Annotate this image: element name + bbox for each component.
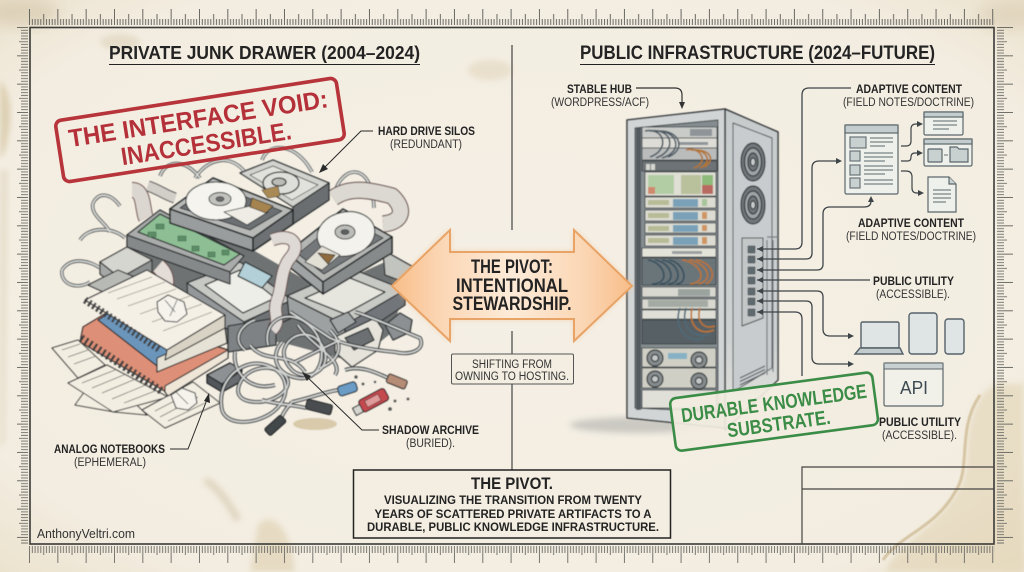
label: public utility upper: PUBLIC UTILITY xyxy=(873,276,954,288)
arrow: the pivot: STEWARDSHIP. xyxy=(452,294,572,315)
icon: laptop tablet phone xyxy=(855,313,964,354)
label: hard drive silos: HARD DRIVE SILOS xyxy=(378,126,475,138)
hard drive: right xyxy=(287,206,392,294)
ribbon cables behind drives xyxy=(132,186,401,224)
caption box: the pivot xyxy=(354,470,670,538)
icon: api window xyxy=(884,363,943,406)
label: hard drive silos: (REDUNDANT) xyxy=(390,139,462,151)
label: adaptive content top: (FIELD NOTES/DOCTRINE) xyxy=(843,97,974,109)
icon: small page panel xyxy=(924,112,963,135)
callout: shifting from owning to hosting: OWNING TO HOSTING. xyxy=(455,371,569,383)
label: shadow archive: (BURIED). xyxy=(406,438,455,450)
label: stable hub: (WORDPRESS/ACF) xyxy=(551,97,649,109)
icon: content page window xyxy=(845,125,898,194)
hard drive: back xyxy=(240,160,329,224)
rack fans front xyxy=(647,350,707,389)
label: adaptive content lower xyxy=(846,218,976,243)
label: analog notebooks: ANALOG NOTEBOOKS xyxy=(54,444,165,456)
arrow: the pivot: THE PIVOT: xyxy=(471,257,553,278)
icon: document xyxy=(928,177,956,212)
rack units xyxy=(642,127,717,408)
callout: shifting from owning to hosting xyxy=(452,354,574,384)
debris xyxy=(354,375,409,411)
lower centre drive xyxy=(187,262,292,352)
drive with circuit board xyxy=(127,210,272,288)
callout: shifting from owning to hosting: SHIFTING FROM xyxy=(472,359,552,371)
label: stable hub xyxy=(551,84,685,109)
attribution: AnthonyVeltri.com xyxy=(37,526,135,541)
stamp: the interface void: THE INTERFACE VOID: xyxy=(67,85,330,153)
side exhaust fans xyxy=(741,143,765,224)
lower left drive xyxy=(88,247,190,318)
title block: empty drawing stamp xyxy=(802,467,994,544)
label: public utility lower: (ACCESSIBLE). xyxy=(882,430,957,442)
icon: folder panel xyxy=(924,139,972,166)
stain under cables xyxy=(293,418,337,430)
server rack xyxy=(570,109,778,433)
caption box: the pivot: THE PIVOT. xyxy=(471,474,553,493)
stamp: the interface void: INACCESSIBLE. xyxy=(119,117,293,171)
stamp: the interface void xyxy=(55,78,345,182)
port panel xyxy=(742,238,763,326)
usb charger block xyxy=(207,363,242,392)
label: stable hub: STABLE HUB xyxy=(567,84,632,96)
label: analog notebooks xyxy=(54,393,210,469)
stamp: durable knowledge substrate xyxy=(669,372,879,451)
illustration: pile of hard drives, notebooks and cables xyxy=(52,148,421,436)
patch cables xyxy=(645,131,715,339)
caption box: the pivot: DURABLE, PUBLIC KNOWLEDGE INFRASTRUCTURE. xyxy=(367,520,659,534)
label: public utility upper: (ACCESSIBLE). xyxy=(876,289,950,301)
status indicators xyxy=(646,129,713,307)
connectors between content icons xyxy=(901,121,924,196)
heading: public infrastructure: PUBLIC INFRASTRUCTURE (2024–FUTURE) xyxy=(580,43,935,64)
arrow: the pivot xyxy=(392,230,632,341)
label: analog notebooks: (EPHEMERAL) xyxy=(74,457,146,469)
icon: api window: API xyxy=(900,378,928,398)
loose papers xyxy=(52,340,220,428)
lower right drives xyxy=(287,250,415,367)
stamp: durable knowledge substrate: SUBSTRATE. xyxy=(726,407,832,442)
label: shadow archive: SHADOW ARCHIVE xyxy=(382,425,479,437)
ribbon cables in front xyxy=(158,238,295,330)
label: public utility lower xyxy=(879,417,961,442)
label: adaptive content top xyxy=(843,84,974,109)
label: adaptive content top: ADAPTIVE CONTENT xyxy=(856,84,962,96)
stamp: durable knowledge substrate: DURABLE KNOWLEDGE xyxy=(680,381,868,427)
hard drive: front xyxy=(170,178,293,251)
label: adaptive content lower: ADAPTIVE CONTENT xyxy=(858,218,964,230)
crumpled paper balls xyxy=(157,295,197,410)
label: adaptive content lower: (FIELD NOTES/DOCTRINE) xyxy=(846,231,976,243)
dark interior of pile xyxy=(127,222,402,358)
arrow: the pivot: INTENTIONAL xyxy=(456,276,568,297)
connector arrows from ports xyxy=(757,88,874,376)
caption box: the pivot: VISUALIZING THE TRANSITION FROM TWENTY xyxy=(384,493,642,507)
label: shadow archive xyxy=(302,372,479,450)
label: public utility lower: PUBLIC UTILITY xyxy=(879,417,961,429)
usb plugs and stick xyxy=(264,374,408,436)
tangled cables xyxy=(221,312,421,422)
heading: private junk drawer: PRIVATE JUNK DRAWER (2004–2024) xyxy=(109,43,420,63)
caption box: the pivot: YEARS OF SCATTERED PRIVATE ARTIFACTS TO A xyxy=(374,507,652,521)
notebooks stack xyxy=(80,270,228,396)
label: public utility upper xyxy=(873,276,954,301)
label: hard drive silos xyxy=(319,126,475,173)
back cables xyxy=(62,148,374,286)
